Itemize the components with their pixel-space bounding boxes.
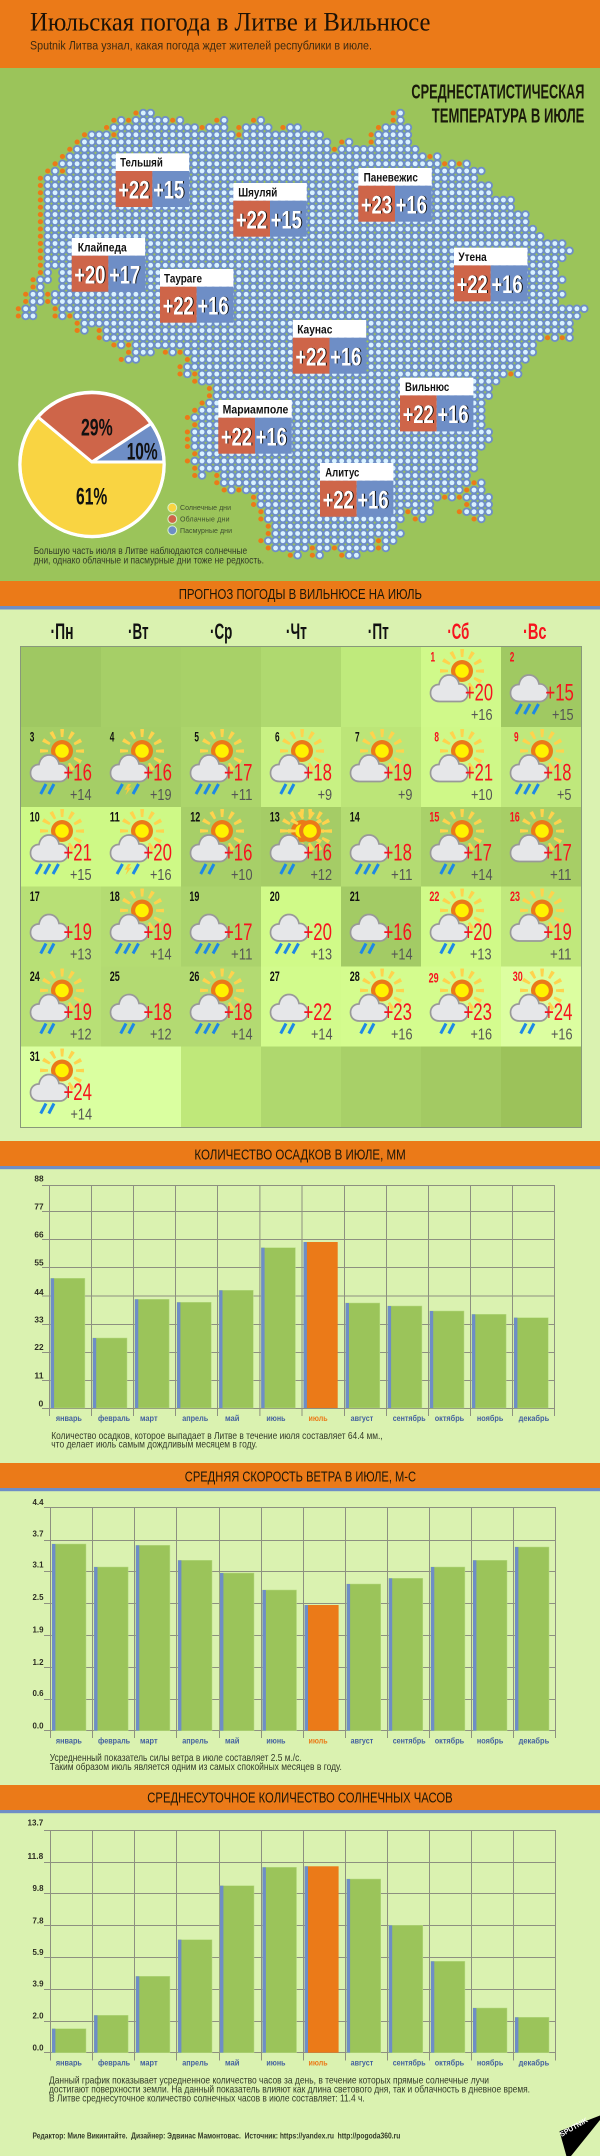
precipitation caption bbox=[51, 1430, 383, 1451]
wind caption: Таким образом июль является одним из самых спокойных месяцев в году. bbox=[50, 1761, 342, 1773]
day 25: 25 bbox=[110, 968, 120, 984]
day 8: +21 bbox=[465, 760, 493, 787]
weekday headers: ·Пн bbox=[50, 619, 74, 644]
month labels: апрель bbox=[182, 2058, 208, 2067]
city: Мариамполе bbox=[218, 400, 292, 454]
day 14 bbox=[341, 807, 421, 887]
pie caption bbox=[34, 545, 264, 566]
day 10: +15 bbox=[70, 867, 92, 884]
day 29 bbox=[421, 966, 501, 1046]
month labels: август bbox=[351, 1736, 373, 1745]
day 31: +14 bbox=[70, 1106, 92, 1124]
pie caption: дни, однако облачные и пасмурные дни тоже не редкость. bbox=[34, 554, 264, 566]
day 16: 16 bbox=[510, 809, 520, 825]
day 20 bbox=[261, 886, 341, 966]
weekday headers: ·Ср bbox=[210, 619, 232, 644]
month labels: июнь bbox=[266, 1414, 286, 1423]
city: Тельшяй: Тельшяй bbox=[120, 158, 163, 170]
section band: forecast bbox=[0, 581, 600, 610]
day 15: +17 bbox=[464, 840, 492, 867]
day 2: +15 bbox=[545, 680, 574, 707]
day 14: +18 bbox=[384, 840, 412, 867]
city: Таураге: +22 bbox=[163, 292, 194, 320]
city: Утена: +16 bbox=[492, 271, 522, 299]
bars bbox=[52, 1866, 549, 2053]
city: Паневежис bbox=[358, 168, 432, 222]
y axis labels: 2.5 bbox=[32, 1592, 44, 1602]
day 4: +16 bbox=[144, 760, 172, 787]
y axis labels bbox=[28, 1818, 44, 2053]
city: Утена bbox=[454, 248, 527, 301]
pie caption: Большую часть июля в Литве наблюдаются солнечные bbox=[34, 545, 247, 557]
city: Клайпеда bbox=[72, 238, 145, 292]
day 17: +13 bbox=[70, 946, 92, 964]
day 15: +14 bbox=[471, 867, 493, 884]
pie legend: Пасмурные дни bbox=[180, 528, 232, 535]
bars bbox=[51, 1242, 548, 1408]
day 12: +16 bbox=[224, 840, 252, 867]
wind caption bbox=[50, 1752, 342, 1773]
Sputnik logo: SPUTNIK bbox=[559, 2117, 589, 2139]
month labels: январь bbox=[56, 1414, 82, 1423]
pie chart: 29% bbox=[81, 415, 113, 442]
day 3: +14 bbox=[70, 787, 92, 804]
title: Июльская погода в Литве и Вильнюсе bbox=[30, 8, 430, 37]
day 13 bbox=[261, 807, 341, 887]
city: Вильнюс bbox=[400, 378, 473, 431]
y axis labels: 3.7 bbox=[32, 1528, 44, 1538]
section band: wind: СРЕДНЯЯ СКОРОСТЬ ВЕТРА В ИЮЛЕ, М-С bbox=[185, 1469, 416, 1485]
wind caption: Усредненный показатель силы ветра в июле составляет 2.5 м./с. bbox=[50, 1752, 302, 1764]
month labels: июль bbox=[308, 2058, 328, 2067]
day 4: 4 bbox=[110, 729, 115, 745]
city: Клайпеда: +17 bbox=[109, 261, 140, 289]
pie legend bbox=[168, 503, 232, 535]
day 18 bbox=[101, 886, 181, 966]
day 25: +18 bbox=[144, 999, 172, 1026]
day 21: +16 bbox=[384, 919, 412, 946]
month labels: октябрь bbox=[435, 1736, 464, 1745]
day 12: 12 bbox=[190, 809, 200, 825]
day 24: +19 bbox=[64, 999, 92, 1026]
day 11: +16 bbox=[150, 867, 172, 884]
day 2: 2 bbox=[510, 649, 515, 665]
y axis labels: 22 bbox=[34, 1342, 44, 1352]
city: Паневежис: Паневежис bbox=[364, 172, 418, 184]
day 30: +24 bbox=[544, 999, 572, 1026]
day 21: +14 bbox=[391, 946, 413, 964]
bar chart: sunshine hours bbox=[28, 1818, 556, 2067]
day 7: +19 bbox=[384, 760, 412, 787]
city: Клайпеда: +20 bbox=[74, 261, 105, 289]
day 31: +24 bbox=[64, 1079, 92, 1106]
y axis labels: 3.1 bbox=[32, 1560, 44, 1570]
city: Паневежис: +23 bbox=[361, 191, 392, 219]
day 10 bbox=[21, 807, 101, 887]
y axis labels: 88 bbox=[34, 1174, 44, 1184]
month labels: декабрь bbox=[519, 2058, 549, 2067]
y axis labels: 0 bbox=[38, 1399, 44, 1409]
sunshine caption: В Литве среднесуточное количество солнечных часов в июле составляет: 11.4 ч. bbox=[49, 2092, 365, 2104]
pie chart bbox=[18, 391, 166, 538]
y axis labels: 9.8 bbox=[32, 1883, 44, 1893]
city: Каунас: +22 bbox=[295, 343, 326, 371]
month labels: сентябрь bbox=[393, 2058, 426, 2067]
day 29: +16 bbox=[470, 1026, 492, 1044]
day 28: +23 bbox=[384, 999, 412, 1026]
month labels: январь bbox=[56, 2058, 82, 2067]
y axis labels: 44 bbox=[34, 1287, 44, 1297]
day 19: +11 bbox=[231, 946, 253, 964]
section band: wind bbox=[0, 1463, 600, 1491]
city: Паневежис: +16 bbox=[396, 191, 427, 219]
pie legend: Облачные дни bbox=[180, 516, 230, 524]
day 13: +16 bbox=[304, 840, 332, 867]
empty cells, last week bbox=[101, 1046, 581, 1127]
day 8 bbox=[421, 727, 501, 807]
city: Каунас: +16 bbox=[330, 343, 361, 371]
month labels: август bbox=[351, 1414, 373, 1423]
month labels: сентябрь bbox=[393, 1736, 426, 1745]
month labels: сентябрь bbox=[393, 1414, 426, 1423]
city: Таураге bbox=[160, 269, 233, 323]
day 16 bbox=[501, 807, 581, 887]
day 22 bbox=[421, 886, 501, 966]
day 20: 20 bbox=[270, 888, 280, 904]
city: Вильнюс: +22 bbox=[403, 401, 434, 429]
month labels: апрель bbox=[182, 1736, 208, 1745]
day 20: +20 bbox=[304, 919, 332, 946]
day 24: +12 bbox=[70, 1026, 92, 1044]
day 24 bbox=[21, 966, 101, 1046]
month labels: февраль bbox=[98, 1736, 130, 1745]
y axis labels: 13.7 bbox=[28, 1818, 43, 1828]
day 1: +20 bbox=[465, 680, 493, 707]
section band: forecast: ПРОГНОЗ ПОГОДЫ В ВИЛЬНЮСЕ НА ИЮЛЬ bbox=[179, 587, 422, 603]
day 14: +11 bbox=[391, 867, 413, 884]
month labels: май bbox=[225, 1736, 240, 1745]
pie chart: 61% bbox=[76, 484, 107, 511]
day 19 bbox=[181, 886, 261, 966]
day 10: 10 bbox=[30, 809, 40, 825]
weekday headers bbox=[50, 619, 546, 644]
month labels: ноябрь bbox=[477, 2058, 503, 2067]
day 9 bbox=[501, 727, 581, 807]
sunshine caption: Данный график показывает усредненное количество часов за день, в течение которых прямые солнечные лучи bbox=[49, 2074, 489, 2086]
bar chart: wind speed bbox=[32, 1497, 556, 1745]
day 26 bbox=[181, 966, 261, 1046]
day 19: +17 bbox=[224, 919, 252, 946]
day 18: +19 bbox=[144, 919, 172, 946]
y axis labels: 11.8 bbox=[28, 1851, 43, 1861]
day 7: 7 bbox=[355, 729, 360, 745]
month labels: октябрь bbox=[435, 1414, 464, 1423]
day 26: 26 bbox=[189, 968, 200, 984]
day 30: +16 bbox=[551, 1026, 573, 1044]
day 13: +12 bbox=[310, 867, 332, 884]
day 3: 3 bbox=[30, 729, 35, 745]
day 7 bbox=[341, 727, 421, 807]
day 9: +5 bbox=[557, 787, 572, 804]
day 3: +16 bbox=[64, 760, 92, 787]
y axis labels: 4.4 bbox=[32, 1497, 44, 1507]
city: Тельшяй: +15 bbox=[153, 177, 184, 205]
city: Клайпеда: Клайпеда bbox=[78, 242, 127, 254]
day 27 bbox=[261, 966, 341, 1046]
y axis labels: 2.0 bbox=[32, 2010, 44, 2020]
header band bbox=[0, 0, 600, 68]
day 28: 28 bbox=[350, 968, 360, 984]
day 21 bbox=[341, 886, 421, 966]
section band: precipitation: КОЛИЧЕСТВО ОСАДКОВ В ИЮЛЕ, ММ bbox=[194, 1147, 406, 1163]
day 12: +10 bbox=[231, 867, 253, 884]
day 5 bbox=[181, 727, 261, 807]
day 16: +11 bbox=[550, 867, 572, 884]
y axis labels: 0.0 bbox=[32, 1721, 44, 1731]
day 21: 21 bbox=[350, 888, 360, 904]
day 5: 5 bbox=[194, 729, 199, 745]
day 19: 19 bbox=[189, 888, 200, 904]
month labels: февраль bbox=[98, 2058, 130, 2067]
section band: sunshine bbox=[0, 1785, 600, 1813]
city: Алитус: +22 bbox=[323, 486, 354, 514]
month labels: ноябрь bbox=[477, 1414, 503, 1423]
Sputnik logo bbox=[559, 2116, 600, 2156]
day 9: +18 bbox=[543, 760, 571, 787]
y axis labels: 77 bbox=[34, 1202, 44, 1212]
city: Вильнюс: Вильнюс bbox=[405, 382, 450, 394]
day 6: +18 bbox=[304, 760, 332, 787]
day 30 bbox=[501, 966, 581, 1046]
weekday headers: ·Вс bbox=[523, 619, 546, 644]
month labels: январь bbox=[56, 1736, 82, 1745]
day 12 bbox=[181, 807, 261, 887]
day 15 bbox=[421, 807, 501, 887]
day 24: 24 bbox=[30, 968, 40, 984]
city: Каунас: Каунас bbox=[297, 324, 333, 336]
city: Шяуляй: +22 bbox=[236, 206, 267, 234]
day 17: +19 bbox=[64, 919, 92, 946]
month labels: июль bbox=[308, 1414, 328, 1423]
city: Вильнюс: +16 bbox=[438, 401, 468, 429]
section band: precipitation bbox=[0, 1141, 600, 1169]
day 10: +21 bbox=[64, 840, 92, 867]
day 27: +14 bbox=[311, 1026, 333, 1044]
city: Тельшяй: +22 bbox=[118, 177, 149, 205]
day 8: 8 bbox=[434, 729, 439, 745]
day 28 bbox=[341, 966, 421, 1046]
month labels: март bbox=[140, 1414, 158, 1423]
day 18: +14 bbox=[150, 946, 172, 964]
dot map of Lithuania bbox=[18, 113, 584, 555]
day 13: 13 bbox=[270, 809, 280, 825]
day 6: +9 bbox=[318, 787, 332, 804]
y axis labels: 55 bbox=[34, 1257, 44, 1267]
month labels: апрель bbox=[182, 1414, 208, 1423]
day 17: 17 bbox=[30, 888, 40, 904]
day 16: +17 bbox=[543, 840, 572, 867]
day 17 bbox=[21, 886, 101, 966]
y axis labels: 7.8 bbox=[32, 1915, 44, 1925]
calendar bbox=[20, 646, 582, 1128]
day 7: +9 bbox=[398, 787, 413, 804]
day 23: 23 bbox=[510, 888, 520, 904]
month labels bbox=[56, 1414, 549, 1423]
pie legend: Солнечные дни bbox=[180, 505, 231, 512]
day 6: 6 bbox=[275, 729, 280, 745]
day 11: 11 bbox=[110, 809, 120, 825]
day 29: 29 bbox=[429, 970, 439, 986]
day 2 bbox=[501, 647, 581, 727]
month labels: март bbox=[140, 1736, 158, 1745]
day 26: +14 bbox=[231, 1026, 253, 1044]
month labels: май bbox=[225, 2058, 240, 2067]
city: Шяуляй: Шяуляй bbox=[238, 187, 277, 199]
day 11: +20 bbox=[144, 840, 172, 867]
month labels: май bbox=[225, 1414, 240, 1423]
y axis labels: 1.9 bbox=[32, 1625, 44, 1635]
y axis labels: 0.0 bbox=[32, 2043, 44, 2053]
day 14: 14 bbox=[350, 809, 360, 825]
day 15: 15 bbox=[429, 809, 440, 825]
y axis labels: 11 bbox=[34, 1371, 44, 1381]
day 23 bbox=[501, 886, 581, 966]
day 23: +11 bbox=[550, 946, 572, 964]
city: Утена: +22 bbox=[457, 271, 488, 299]
month labels bbox=[56, 2058, 549, 2067]
city: Каунас bbox=[293, 320, 366, 374]
y axis labels bbox=[34, 1174, 44, 1409]
city: Алитус: +16 bbox=[358, 486, 388, 514]
precipitation caption: что делает июль самым дождливым месяцем в году. bbox=[51, 1439, 257, 1451]
day 5: +17 bbox=[224, 760, 252, 787]
day 1: +16 bbox=[471, 707, 493, 724]
city: Таураге: +16 bbox=[198, 292, 228, 320]
day 2: +15 bbox=[552, 707, 574, 724]
y axis labels: 33 bbox=[34, 1314, 44, 1324]
y axis labels: 0.6 bbox=[32, 1688, 44, 1698]
y axis labels: 5.9 bbox=[32, 1947, 44, 1957]
city: Тельшяй bbox=[116, 153, 189, 207]
day 28: +16 bbox=[391, 1026, 413, 1044]
day 22: 22 bbox=[429, 888, 440, 904]
month labels: декабрь bbox=[519, 1414, 549, 1423]
day 3 bbox=[21, 727, 101, 807]
month labels: июль bbox=[308, 1736, 328, 1745]
month labels: февраль bbox=[98, 1414, 130, 1423]
day 29: +23 bbox=[464, 999, 492, 1026]
pie chart: 10% bbox=[127, 438, 158, 465]
day 1: 1 bbox=[430, 649, 435, 665]
y axis labels: 66 bbox=[34, 1230, 44, 1240]
city: Мариамполе: +22 bbox=[221, 423, 252, 451]
city: Алитус bbox=[320, 463, 393, 517]
month labels: июнь bbox=[266, 1736, 286, 1745]
day 4: +19 bbox=[150, 787, 172, 804]
weekday headers: ·Чт bbox=[286, 619, 307, 644]
month labels bbox=[56, 1736, 549, 1745]
city: Утена: Утена bbox=[458, 252, 487, 264]
day 4 bbox=[101, 727, 181, 807]
day 22: +20 bbox=[464, 919, 492, 946]
empty cells, first week bbox=[21, 647, 421, 727]
month labels: декабрь bbox=[519, 1736, 549, 1745]
day 27: 27 bbox=[270, 968, 280, 984]
credits: Редактор: Миле Викинтайте. Дизайнер: Эдвинас Мамонтовас. Источник: https://yandex.ru http://pogoda360.ru bbox=[32, 2131, 400, 2141]
y axis labels: 3.9 bbox=[32, 1979, 44, 1989]
month labels: август bbox=[351, 2058, 373, 2067]
panel: map of average temperatures bbox=[0, 68, 600, 581]
day 30: 30 bbox=[513, 968, 523, 984]
city: Таураге: Таураге bbox=[164, 273, 202, 285]
month labels: март bbox=[140, 2058, 158, 2067]
subtitle: Sputnik Литва узнал, какая погода ждет жителей республики в июле. bbox=[30, 40, 372, 52]
day 8: +10 bbox=[471, 787, 493, 804]
section band: sunshine: СРЕДНЕСУТОЧНОЕ КОЛИЧЕСТВО СОЛНЕЧНЫХ ЧАСОВ bbox=[147, 1791, 453, 1807]
city: Мариамполе: Мариамполе bbox=[223, 404, 288, 416]
day 22: +13 bbox=[470, 946, 492, 964]
weekday headers: ·Сб bbox=[447, 619, 469, 644]
y axis labels bbox=[32, 1497, 44, 1731]
heading: average temperature in July bbox=[411, 82, 584, 127]
city: Мариамполе: +16 bbox=[256, 423, 287, 451]
day 6 bbox=[261, 727, 341, 807]
day 25: +12 bbox=[150, 1026, 172, 1044]
day 25 bbox=[101, 966, 181, 1046]
sunshine caption bbox=[49, 2074, 530, 2104]
day 31: 31 bbox=[30, 1048, 40, 1064]
day 27: +22 bbox=[304, 999, 332, 1026]
y axis labels: 1.2 bbox=[32, 1657, 44, 1667]
city: Шяуляй: +15 bbox=[271, 206, 302, 234]
day 20: +13 bbox=[310, 946, 332, 964]
day 23: +19 bbox=[543, 919, 572, 946]
month labels: октябрь bbox=[435, 2058, 464, 2067]
bar chart: precipitation bbox=[34, 1174, 554, 1423]
day 1 bbox=[421, 647, 501, 727]
day 9: 9 bbox=[514, 729, 519, 745]
precipitation caption: Количество осадков, которое выпадает в Литве в течение июля составляет 64.4 мм., bbox=[51, 1430, 383, 1442]
weekday headers: ·Пт bbox=[368, 619, 389, 644]
day 11 bbox=[101, 807, 181, 887]
weekday headers: ·Вт bbox=[128, 619, 149, 644]
city: Шяуляй bbox=[233, 183, 307, 237]
month labels: ноябрь bbox=[477, 1736, 503, 1745]
bars bbox=[52, 1544, 549, 1731]
day 31 bbox=[21, 1046, 101, 1127]
day 5: +11 bbox=[231, 787, 253, 804]
month labels: июнь bbox=[266, 2058, 286, 2067]
day 18: 18 bbox=[110, 888, 120, 904]
day 26: +18 bbox=[224, 999, 252, 1026]
city: Алитус: Алитус bbox=[325, 467, 360, 479]
